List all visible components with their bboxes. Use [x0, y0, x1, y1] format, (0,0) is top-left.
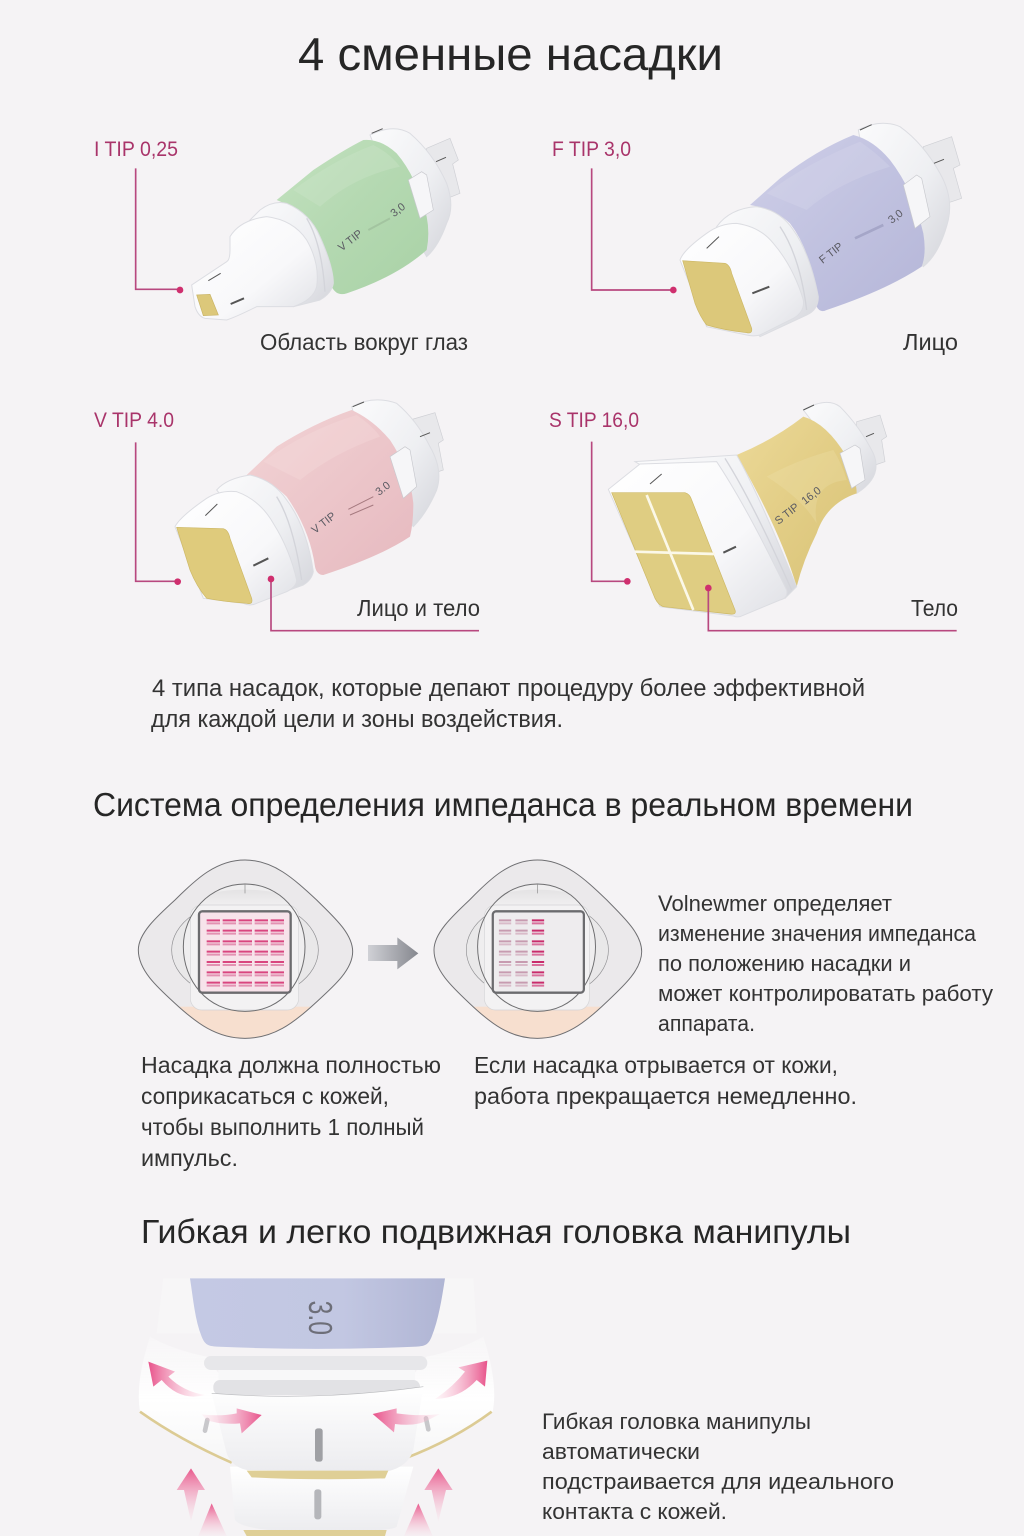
illustration: pink nozzle: 3.0	[373, 479, 393, 498]
arrow: tilt upper left	[148, 1362, 205, 1397]
arrow: up left inner	[198, 1503, 227, 1536]
text: Volnewmer description	[658, 891, 994, 1036]
caption: eye area: Область вокруг глаз	[260, 329, 468, 355]
text: Volnewmer description: Volnewmer определяет	[658, 891, 892, 916]
pointer lines	[136, 442, 479, 631]
arrow: press left	[202, 1408, 262, 1433]
label: S TIP 16,0: S TIP 16,0	[549, 409, 639, 432]
pointer line	[136, 168, 183, 293]
panel: S TIP nozzle	[549, 402, 958, 631]
paragraph: four tip types: для каждой цели и зоны воздействия.	[151, 706, 563, 733]
label: V TIP 4.0: V TIP 4.0	[94, 409, 174, 432]
diagram: impedance full contact	[130, 860, 363, 1043]
title: 4 сменные насадки	[298, 28, 723, 80]
text: full contact note: соприкасаться с кожей,	[141, 1083, 389, 1109]
caption: face: Лицо	[903, 329, 958, 355]
text: flexible head description: контакта с кожей.	[542, 1499, 727, 1524]
illustration: yellow nozzle: S TIP	[773, 501, 802, 527]
text: lift-off note	[474, 1052, 857, 1109]
text: flexible head description: Гибкая головка манипулы	[542, 1409, 811, 1434]
illustration: yellow nozzle: 16,0	[799, 485, 824, 507]
paragraph: four tip types: 4 типа насадок, которые депают процедуру более эффективной	[152, 675, 865, 702]
pointer lines	[592, 442, 957, 631]
label: F TIP 3,0: F TIP 3,0	[552, 138, 631, 161]
arrow: press right	[373, 1408, 440, 1432]
illustration: pink nozzle	[136, 400, 479, 631]
arrow: transition	[368, 937, 418, 969]
caption: body: Тело	[911, 595, 958, 621]
panel: V TIP nozzle	[94, 400, 480, 631]
arrow: up right inner	[404, 1503, 433, 1536]
text: full contact note	[141, 1052, 441, 1171]
illustration: green nozzle	[136, 129, 460, 320]
text: Volnewmer description: может контролироватать работу	[658, 981, 994, 1006]
text: full contact note: импульс.	[141, 1145, 238, 1171]
panel: I TIP nozzle	[94, 129, 468, 355]
text: full contact note: чтобы выполнить 1 полный	[141, 1114, 424, 1140]
caption: face and body: Лицо и тело	[357, 595, 480, 621]
text: Volnewmer description: аппарата.	[658, 1011, 755, 1036]
illustration: green nozzle: 3,0	[388, 201, 408, 220]
text: lift-off note: Если насадка отрывается от кожи,	[474, 1052, 838, 1078]
text: flexible head description: подстраивается для идеального	[542, 1469, 894, 1494]
illustration: purple nozzle: F TIP	[817, 240, 846, 266]
text: flexible head description: автоматически	[542, 1439, 700, 1464]
illustration: pink nozzle: V TIP	[309, 510, 338, 536]
arrow: up left outer	[177, 1468, 205, 1522]
pointer line	[592, 168, 677, 293]
illustration: purple nozzle: 3,0	[886, 207, 906, 226]
illustration: flexible handpiece head: 3.0	[301, 1301, 338, 1335]
text: full contact note: Насадка должна полностью	[141, 1052, 441, 1078]
diagram: impedance lifted	[426, 860, 652, 1043]
heading: impedance system: Система определения импеданса в реальном времени	[93, 786, 913, 823]
heading: flexible head: Гибкая и легко подвижная головка манипулы	[141, 1213, 851, 1250]
panel: F TIP nozzle	[552, 123, 962, 355]
paragraph: four tip types	[151, 675, 865, 733]
illustration: green nozzle: V TIP	[336, 228, 365, 254]
label: I TIP 0,25: I TIP 0,25	[94, 138, 178, 161]
arrow: up right outer	[424, 1468, 453, 1522]
illustration: purple nozzle	[592, 123, 962, 337]
arrow: tilt upper right	[435, 1361, 487, 1399]
text: flexible head description	[542, 1409, 894, 1524]
text: Volnewmer description: изменение значения импеданса	[658, 921, 976, 946]
illustration: flexible handpiece head	[139, 1278, 494, 1536]
text: Volnewmer description: по положению насадки и	[658, 951, 911, 976]
illustration: yellow nozzle	[592, 402, 957, 631]
text: lift-off note: работа прекращается немедленно.	[474, 1083, 857, 1109]
